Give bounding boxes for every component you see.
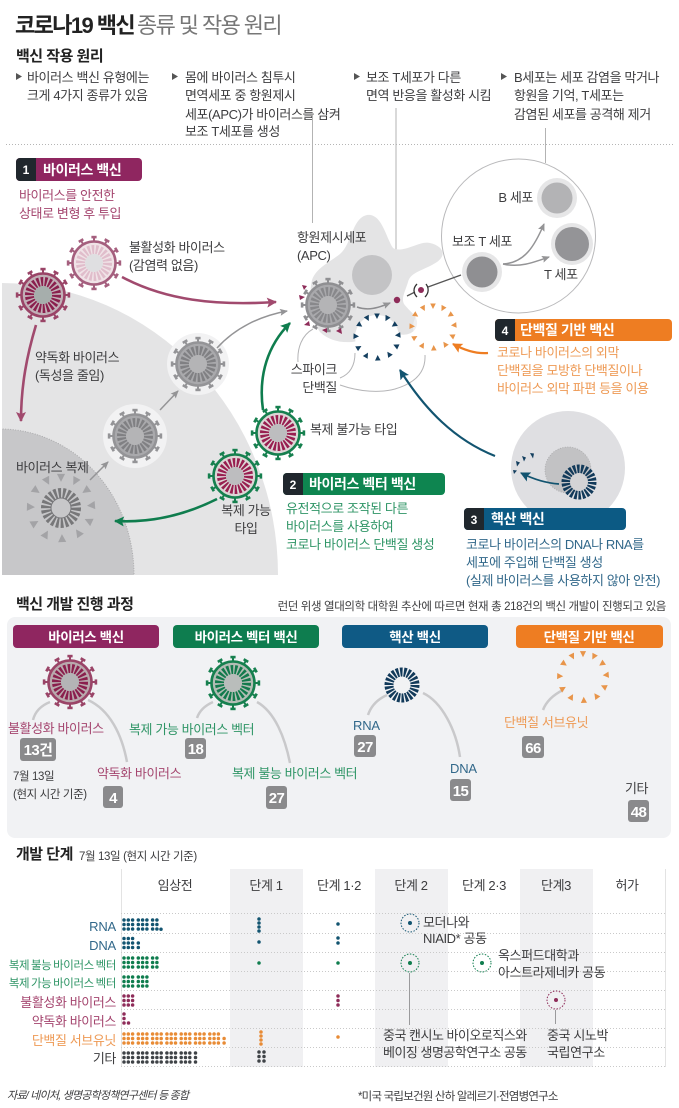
row labels: 기타 xyxy=(93,1051,116,1066)
stage headers: 단계 1 xyxy=(249,878,283,893)
leader lines xyxy=(312,108,546,300)
callout: CanSino: 중국 캔시노 바이오로직스와 xyxy=(383,1028,527,1043)
text block: bullet 2: 몸에 바이러스 침투시 xyxy=(185,70,295,85)
dots: preclinical xyxy=(124,920,228,1062)
heading: development stages: 개발 단계 xyxy=(16,846,73,863)
badge 2: viral vector vaccine: 바이러스 벡터 백신 xyxy=(309,476,416,492)
arrow: protein vaccine to spike xyxy=(453,344,488,353)
text block: nucleic acid description: 세포에 주입해 단백질 생성 xyxy=(466,555,603,570)
row labels: 복제 가능 바이러스 벡터 xyxy=(9,977,116,990)
APC label: 항원제시세포 xyxy=(297,230,367,245)
panel: development progress xyxy=(7,617,671,838)
callout: Sinovac xyxy=(547,991,608,1060)
badge 4: protein vaccine: 단백질 기반 백신 xyxy=(520,322,614,338)
spike label xyxy=(291,329,425,395)
column: nucleic acid vaccine: 27 xyxy=(357,739,373,756)
text block: bullet 1 xyxy=(16,70,149,103)
arrow: lower to upper gray virus xyxy=(160,391,178,410)
callout: Moderna xyxy=(401,914,487,946)
text block: bullet 4 xyxy=(501,70,660,122)
badge 4: protein vaccine: 4 xyxy=(502,324,509,338)
title xyxy=(15,13,281,38)
label: virus replication: 바이러스 복제 xyxy=(16,460,89,475)
heading: development progress: 백신 개발 진행 과정 xyxy=(16,596,133,613)
heading: development stages xyxy=(16,846,197,863)
column: nucleic acid vaccine: RNA xyxy=(353,718,380,733)
badge 1: virus vaccine: 1 xyxy=(23,163,30,177)
badge 2: viral vector vaccine: 2 xyxy=(290,478,297,492)
badge 3: nucleic acid vaccine xyxy=(464,508,626,530)
column: protein vaccine: 기타 xyxy=(625,781,649,796)
B cell xyxy=(498,178,577,218)
column: virus vaccine: 13건 xyxy=(24,742,52,759)
callout: Oxford xyxy=(473,948,606,980)
row labels: 단백질 서브유닛 xyxy=(32,1033,116,1048)
column: protein vaccine xyxy=(504,625,663,822)
virus inside APC xyxy=(299,278,355,334)
column: nucleic acid vaccine xyxy=(342,625,488,801)
callout: CanSino xyxy=(383,954,527,1060)
column: virus vaccine: 7월 13일 xyxy=(13,769,54,783)
column: virus vaccine: 4 xyxy=(109,790,118,807)
row labels: 불활성화 바이러스 xyxy=(20,995,116,1010)
spike label: 스파이크 xyxy=(291,362,337,377)
callout: Moderna: 모더나와 xyxy=(423,915,470,930)
label: inactivated virus: 불활성화 바이러스 xyxy=(129,240,225,255)
text block: viral vector description: 바이러스를 사용하여 xyxy=(286,519,393,534)
badge 2: viral vector vaccine xyxy=(283,473,445,495)
arrow: replicating vector to replication xyxy=(115,499,217,521)
text block: viral vector description: 코로나 바이러스 단백질 생성 xyxy=(286,537,434,552)
text block: bullet 1: 바이러스 백신 유형에는 xyxy=(27,70,149,85)
icon: spike proteins in cell xyxy=(513,453,534,474)
text block: bullet 1: 크게 4가지 종류가 있음 xyxy=(27,88,148,103)
arrow: inactivated virus to APC xyxy=(122,277,276,303)
arrow: helper T to B cell xyxy=(503,224,544,264)
arrow: nucleic acid to spike xyxy=(521,473,559,484)
panel: B and T cells circle xyxy=(442,159,596,313)
icon: inactivated virus xyxy=(67,236,121,290)
text block: protein vaccine description: 바이러스 외막 파편 등을 이용 xyxy=(497,381,649,396)
callout: Sinovac: 국립연구소 xyxy=(547,1045,605,1060)
row labels: RNA xyxy=(89,919,117,934)
footnote: *미국 국립보건원 산하 알레르기·전염병연구소 xyxy=(358,1089,558,1103)
column: viral vector vaccine: 바이러스 벡터 백신 xyxy=(195,630,297,645)
stage headers: 임상전 xyxy=(158,878,192,893)
text block: bullet 2: 면역세포 중 항원제시 xyxy=(185,88,295,103)
heading: vaccine mechanism: 백신 작용 원리 xyxy=(16,48,103,65)
helper T cell xyxy=(452,234,512,292)
dots: stage 1-2 xyxy=(336,924,340,1037)
column: viral vector vaccine xyxy=(129,625,357,809)
title: 코로나19 백신 xyxy=(15,13,134,38)
panel: body background xyxy=(2,283,278,575)
column: nucleic acid vaccine: DNA xyxy=(450,761,477,776)
T cell xyxy=(544,223,593,282)
label: inactivated virus: (감염력 없음) xyxy=(129,258,198,273)
column: virus vaccine: 약독화 바이러스 xyxy=(97,766,182,781)
label: inactivated virus xyxy=(129,240,225,273)
label: replicating type: 복제 가능 xyxy=(221,503,271,518)
callout: Moderna: NIAID* 공동 xyxy=(423,931,487,946)
column: virus vaccine xyxy=(8,625,182,808)
icon: nucleic acid virus xyxy=(566,469,592,495)
badge 1: virus vaccine xyxy=(16,158,142,181)
stage headers xyxy=(158,878,639,893)
row labels xyxy=(9,919,117,1066)
label: weakened virus xyxy=(35,350,120,383)
text block: bullet 4: B세포는 세포 감염을 막거나 xyxy=(514,70,660,85)
text block: virus vaccine description xyxy=(19,188,121,221)
column: viral vector vaccine: 27 xyxy=(269,790,284,807)
column: viral vector vaccine: 복제 가능 바이러스 벡터 xyxy=(129,722,254,737)
column: protein vaccine: 48 xyxy=(631,804,646,821)
text block: nucleic acid description: (실제 바이러스를 사용하지 않아 안전) xyxy=(466,573,660,588)
column: protein vaccine: 단백질 기반 백신 xyxy=(544,630,634,645)
helper T cell: 보조 T 세포 xyxy=(452,234,512,249)
B cell: B 세포 xyxy=(498,190,533,205)
column: nucleic acid vaccine: 15 xyxy=(453,783,468,800)
badge 3: nucleic acid vaccine: 핵산 백신 xyxy=(491,511,544,527)
column: virus vaccine: 불활성화 바이러스 xyxy=(8,721,104,736)
icon: replicating vector virus xyxy=(208,449,262,503)
callout: Oxford: 아스트라제네카 공동 xyxy=(498,965,606,980)
text block: nucleic acid description: 코로나 바이러스의 DNA나 RNA를 xyxy=(466,537,644,552)
title: 종류 및 작용 원리 xyxy=(137,13,281,38)
label: non-replicating type: 복제 불가능 타입 xyxy=(310,422,397,437)
text block: protein vaccine description: 단백질을 모방한 단백질이나 xyxy=(497,363,643,378)
text block: bullet 2: 세포(APC)가 바이러스를 삼켜 xyxy=(185,107,340,122)
column: nucleic acid vaccine: 핵산 백신 xyxy=(389,630,441,645)
icon: replicated gray virus lower xyxy=(103,404,167,468)
column: protein vaccine: 66 xyxy=(525,740,541,757)
arrow: replication to lower gray virus xyxy=(90,462,108,480)
text block: bullet 4: 감염된 세포를 공격해 제거 xyxy=(514,107,651,122)
protein ring: nucleic xyxy=(353,314,401,361)
source: 자료/ 네이처, 생명공학정책연구센터 등 종합 xyxy=(7,1089,191,1102)
column: virus vaccine: 바이러스 백신 xyxy=(48,630,124,645)
stage headers: 허가 xyxy=(615,878,639,893)
stage headers: 단계 2·3 xyxy=(462,878,506,893)
panel: antigen presenting cell xyxy=(291,215,461,395)
antigen dot xyxy=(394,297,400,303)
stage headers: 단계 1·2 xyxy=(317,878,361,893)
stage headers: 단계3 xyxy=(541,878,571,893)
row labels: 약독화 바이러스 xyxy=(32,1014,116,1029)
text block: virus vaccine description: 바이러스를 안전한 xyxy=(19,188,115,203)
text block: protein vaccine description xyxy=(497,345,649,396)
text block: bullet 4: 항원을 기억, T세포는 xyxy=(514,88,624,103)
label: replicating type xyxy=(221,503,271,536)
callout: Sinovac: 중국 시노박 xyxy=(547,1028,608,1043)
text block: bullet 3: 면역 반응을 활성화 시킴 xyxy=(366,88,491,103)
arrow: gray virus to APC xyxy=(217,311,287,348)
icon: replicating virus xyxy=(27,474,95,542)
stage headers: 단계 2 xyxy=(394,878,428,893)
icon: non-replicating vector virus xyxy=(251,406,305,460)
text block: bullet 2: 보조 T세포를 생성 xyxy=(185,124,280,139)
antigen receptor xyxy=(407,275,461,297)
row labels: DNA xyxy=(89,938,117,953)
spike label: 단백질 xyxy=(302,380,337,395)
label: weakened virus: 약독화 바이러스 xyxy=(35,350,120,365)
arrow: weakened virus down xyxy=(21,325,36,421)
protein ring: orange xyxy=(409,304,457,351)
panel: stage grid xyxy=(9,869,666,1067)
badge 4: protein vaccine xyxy=(495,319,672,341)
column: virus vaccine: (현지 시간 기준) xyxy=(13,788,87,801)
label: replicating type: 타입 xyxy=(234,521,258,536)
text block: bullet 2 xyxy=(172,70,340,139)
row labels: 복제 불능 바이러스 벡터 xyxy=(9,959,116,972)
icon: replicated gray virus upper xyxy=(167,333,229,395)
badge 1: virus vaccine: 바이러스 백신 xyxy=(43,162,121,178)
column: protein vaccine: 단백질 서브유닛 xyxy=(504,715,588,730)
text: development note: 런던 위생 열대의학 대학원 추산에 따르면 현재 총 218건의 백신 개발이 진행되고 있음 xyxy=(278,599,666,613)
text block: bullet 3 xyxy=(354,70,491,103)
arrow: non-replicating vector to APC xyxy=(262,323,290,410)
text block: protein vaccine description: 코로나 바이러스의 외막 xyxy=(497,345,619,360)
arrow inside APC xyxy=(357,303,390,309)
arrow: nucleic acid to APC xyxy=(400,370,495,456)
APC label xyxy=(297,230,367,263)
arrow: helper T to T cell xyxy=(503,257,549,265)
APC label: (APC) xyxy=(297,248,330,263)
text block: viral vector description: 유전적으로 조작된 다른 xyxy=(286,501,408,516)
callout: CanSino: 베이징 생명공학연구소 공동 xyxy=(383,1045,527,1060)
column: viral vector vaccine: 복제 불능 바이러스 벡터 xyxy=(232,766,357,781)
text block: nucleic acid description xyxy=(466,537,660,588)
badge 3: nucleic acid vaccine: 3 xyxy=(471,513,478,527)
column: viral vector vaccine: 18 xyxy=(188,741,203,758)
text block: bullet 3: 보조 T세포가 다른 xyxy=(366,70,461,85)
text block: virus vaccine description: 상태로 변형 후 투입 xyxy=(19,206,121,221)
panel: nucleic acid cell xyxy=(511,411,625,508)
label: weakened virus: (독성을 줄임) xyxy=(35,368,104,383)
T cell: T 세포 xyxy=(544,267,578,282)
icon: weakened virus xyxy=(16,268,70,322)
heading: development stages: 7월 13일 (현지 시간 기준) xyxy=(79,849,197,863)
callout: Oxford: 옥스퍼드대학과 xyxy=(498,948,579,963)
text block: viral vector description xyxy=(286,501,434,552)
dots: stage 1 xyxy=(259,919,264,1062)
